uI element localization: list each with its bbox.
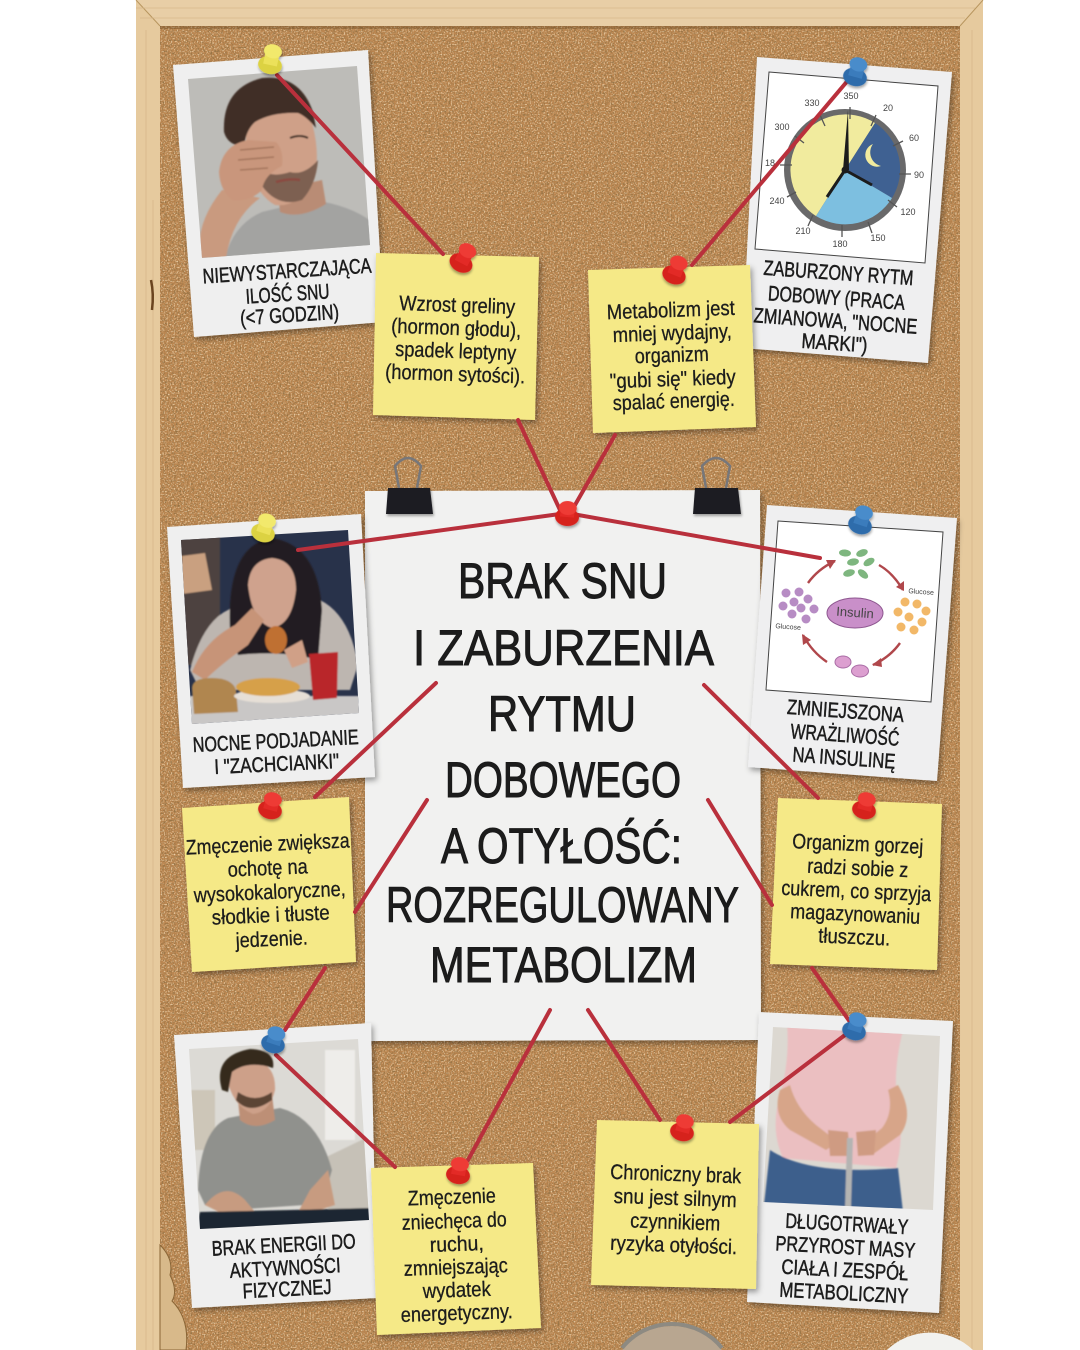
caption: AKTYWNOŚCI (229, 1253, 341, 1283)
sticky note: obesity risk: Chroniczny brak (610, 1161, 742, 1188)
sticky note: sugar handling: Organizm gorzej (792, 830, 924, 859)
chart: 24h clock: 20 (883, 103, 893, 113)
caption: FIZYCZNEJ (242, 1276, 332, 1303)
icon: red pin, note 1 (446, 239, 481, 277)
heading: RYTMU (488, 686, 636, 742)
caption: I "ZACHCIANKI" (214, 750, 340, 779)
caption: PRZYROST MASY (775, 1232, 916, 1263)
sticky note: metabolism: "gubi się" kiedy (609, 366, 737, 393)
sticky note: less movement: energetyczny. (400, 1300, 513, 1327)
photo: woman eating at night (181, 530, 359, 724)
icon: blue pin, insulin (846, 502, 878, 537)
icon: red pin, note 4 (850, 790, 880, 822)
icon: yellow pin, night eating (249, 510, 281, 545)
chart: 24h clock: 150 (870, 233, 886, 243)
sticky note: cravings: jedzenie. (234, 926, 308, 953)
sticky note: metabolism: mniej wydajny, (612, 320, 732, 347)
sticky note: less movement: zmniejszając (403, 1254, 508, 1281)
chart: 24h clock: 180 (832, 239, 848, 249)
photo card: disrupted circadian rhythm (742, 57, 952, 363)
caption (786, 696, 905, 774)
heading: METABOLIZM (430, 937, 697, 993)
photo card: low energy (174, 1023, 377, 1308)
sticky note: metabolism: spalać energię. (612, 388, 735, 415)
caption (775, 1210, 916, 1308)
magnifying glass at bottom edge (622, 1324, 722, 1350)
photo card: sleep deprivation (173, 50, 384, 337)
heading: ROZREGULOWANY (386, 877, 739, 933)
caption: ZMNIEJSZONA (786, 696, 905, 727)
caption: ZABURZONY RYTM (763, 257, 914, 290)
sticky note: cravings: słodkie i tłuste (211, 901, 330, 930)
caption: DOBOWY (PRACA (767, 282, 906, 315)
caption: ILOŚĆ SNU (245, 279, 330, 309)
sticky note: less movement: wydatek (422, 1278, 492, 1303)
sticky note: sugar handling: cukrem, co sprzyja (781, 877, 932, 906)
caption: MARKI") (801, 330, 868, 357)
icon: red pin, note 2 (660, 252, 693, 288)
photo card: night eating (167, 514, 375, 788)
sticky note: obesity risk: ryzyka otyłości. (610, 1232, 738, 1259)
chart: 24h clock: 300 (774, 122, 790, 132)
caption (202, 255, 372, 330)
photo card: weight gain (747, 1012, 953, 1313)
caption: (<7 GODZIN) (239, 301, 340, 330)
sticky note: ghrelin and leptin: Wzrost greliny (399, 292, 516, 319)
central paper panel (365, 490, 761, 1041)
icon: binder clip right (693, 458, 741, 514)
diagram: insulin cycle: Glucose (775, 623, 801, 632)
icon: red pin, note 3 (256, 790, 286, 822)
caption: CIAŁA I ZESPÓŁ (781, 1256, 909, 1285)
photo card: insulin sensitivity (748, 505, 957, 781)
sticky note: less movement: ruchu, (429, 1232, 484, 1257)
sticky note: less movement: Zmęczenie (407, 1184, 496, 1211)
chart: 24h clock: 60 (909, 133, 919, 143)
chart: 24h clock: 210 (795, 226, 811, 236)
caption (211, 1230, 356, 1303)
caption: NOCNE PODJADANIE (192, 726, 359, 757)
heading: A OTYŁOŚĆ: (441, 817, 682, 874)
icon: red pin, centre knot (554, 500, 580, 527)
sticky note: ghrelin and leptin: (hormon sytości). (385, 361, 526, 388)
sticky note: metabolism: organizm (634, 343, 709, 368)
icon: red pin, note 5 (445, 1155, 473, 1186)
chart: 24h clock: 350 (843, 91, 859, 101)
diagram: insulin cycle: Glucose (908, 588, 934, 597)
cork board background (160, 26, 960, 1350)
heading: I ZABURZENIA (413, 620, 715, 676)
red strings connecting the cards (276, 72, 855, 1167)
icon: yellow pin, top left (256, 42, 286, 76)
sticky note: obesity risk (591, 1120, 759, 1289)
sticky note: metabolism: Metabolizm jest (606, 297, 735, 324)
sticky note: less movement (371, 1163, 541, 1335)
sticky note: cravings: wysokokaloryczne, (192, 878, 346, 907)
sticky note: cravings: Zmęczenie zwiększa (185, 829, 350, 860)
caption (192, 726, 359, 779)
heading (386, 553, 739, 993)
wooden frame (136, 0, 983, 1350)
caption: NA INSULINĘ (792, 743, 896, 774)
sticky note: sugar handling: radzi sobie z (807, 855, 909, 882)
sticky note: cravings (182, 797, 356, 972)
sticky note: cravings: ochotę na (227, 855, 308, 882)
photo: waist measurement (763, 1027, 940, 1210)
chart: 24h clock: 18 (765, 158, 775, 168)
photo: tired man on sofa (189, 1039, 369, 1229)
chart: 24h clock: 330 (804, 98, 820, 108)
sticky note: metabolism (588, 265, 756, 433)
caption: WRAŻLIWOŚĆ (790, 719, 900, 751)
caption: DŁUGOTRWAŁY (785, 1210, 909, 1239)
sticky note: ghrelin and leptin: (hormon głodu), (391, 315, 522, 342)
corkboard infographic (136, 0, 984, 1350)
sticky note: less movement: zniechęca do (401, 1208, 507, 1235)
caption: NIEWYSTARCZAJĄCA (202, 255, 372, 288)
chart: 24h clock: 240 (769, 196, 785, 206)
heading: BRAK SNU (458, 553, 667, 609)
white cup at bottom corner (887, 1333, 973, 1350)
sticky note: sugar handling: tłuszczu. (818, 924, 891, 951)
caption: ZMIANOWA, "NOCNE (753, 304, 918, 339)
chart: 24h clock: 90 (914, 170, 924, 180)
photo: tired man rubbing eye (188, 66, 370, 258)
sticky note: ghrelin and leptin: spadek leptyny (395, 338, 517, 365)
icon: red pin, note 6 (668, 1112, 698, 1144)
burnt paper scrap (160, 1245, 187, 1350)
sticky note: sugar handling: magazynowaniu (790, 900, 921, 929)
caption: BRAK ENERGII DO (211, 1230, 356, 1261)
icon: blue pin, low energy (259, 1023, 290, 1056)
diagram: insulin cycle (775, 548, 934, 677)
sticky note: sugar handling (770, 798, 942, 970)
caption: METABOLICZNY (779, 1279, 909, 1308)
sticky note: ghrelin and leptin (373, 253, 539, 420)
icon: blue pin, weight gain (840, 1009, 871, 1043)
caption (753, 257, 918, 357)
heading: DOBOWEGO (445, 752, 681, 808)
chart: 24h clock (765, 91, 924, 249)
chart: 24h clock: 120 (900, 207, 916, 217)
icon: blue pin, clock (841, 55, 872, 89)
sticky note: obesity risk: snu jest silnym (613, 1185, 737, 1212)
sticky note: obesity risk: czynnikiem (630, 1209, 721, 1236)
diagram: insulin cycle: Insulin (836, 604, 874, 621)
icon: binder clip left (386, 458, 433, 514)
